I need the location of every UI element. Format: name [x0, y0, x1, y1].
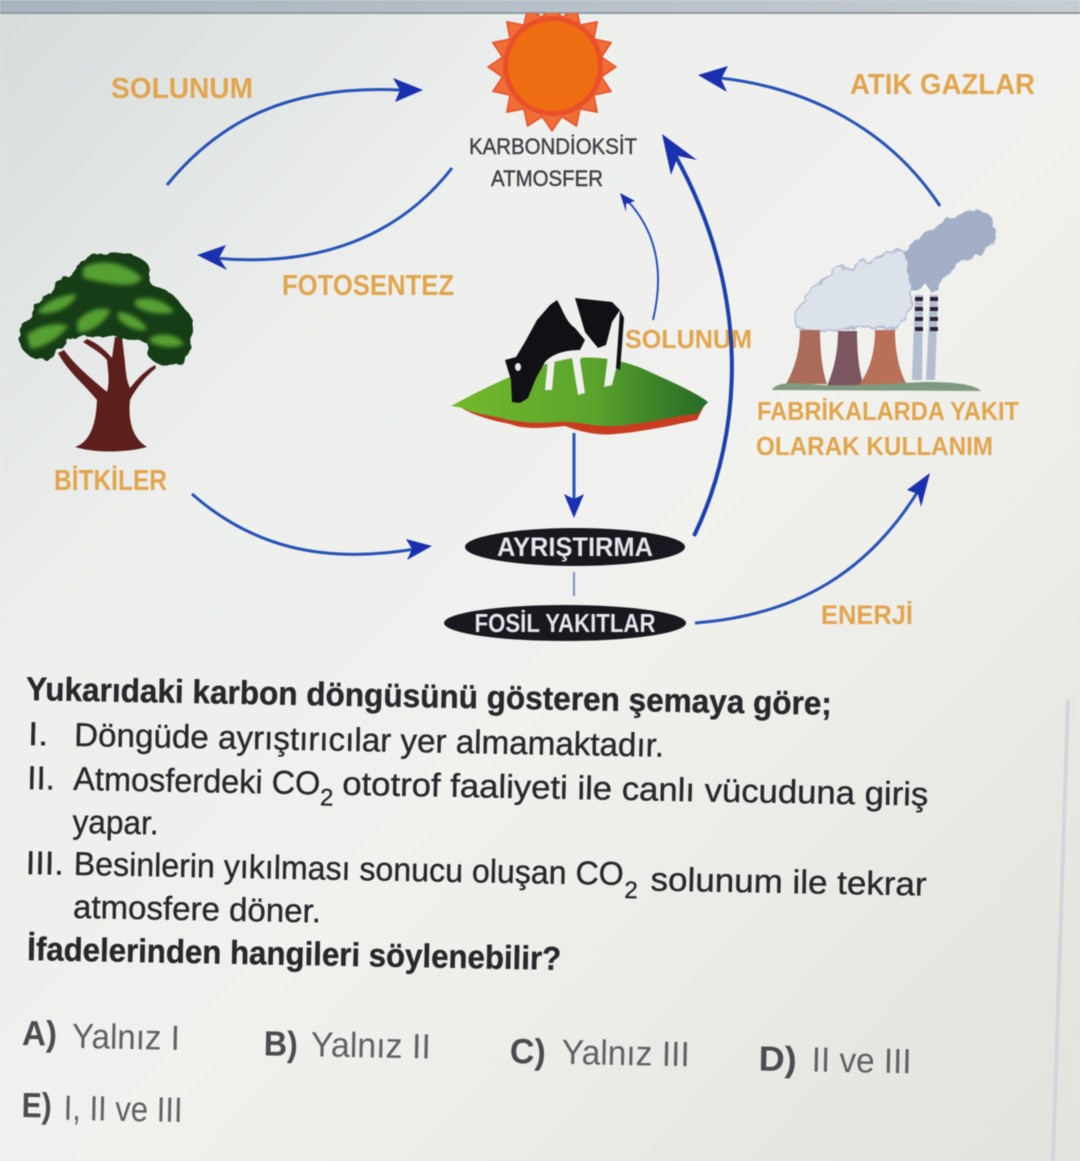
answer options: Yalnız I — [72, 1017, 180, 1058]
orange diagram labels: SOLUNUM — [111, 73, 253, 105]
orange diagram labels: BİTKİLER — [54, 465, 167, 497]
arrows — [167, 66, 940, 623]
question text: ototrof faaliyeti ile canlı vücuduna giriş — [342, 765, 929, 813]
question text: III. — [25, 844, 64, 882]
question text: yapar. — [72, 803, 159, 841]
tree highlights — [27, 263, 184, 348]
chimneys — [912, 295, 923, 380]
question text: I. — [28, 715, 49, 752]
question text: Döngüde ayrıştırıcılar yer almamaktadır. — [74, 716, 664, 764]
answer options: B) — [264, 1024, 298, 1064]
answer options: I, II ve III — [63, 1089, 183, 1130]
label: atmosphere — [469, 134, 637, 191]
cow black front — [505, 300, 585, 403]
question text — [21, 670, 930, 984]
tree canopy — [18, 252, 192, 365]
label: fossil fuels: FOSİL YAKITLAR — [474, 608, 656, 638]
factory white smoke — [795, 250, 914, 331]
grass mound — [451, 358, 708, 426]
answer options: A) — [22, 1014, 57, 1054]
orange diagram labels: ENERJİ — [821, 600, 913, 630]
orange diagram labels — [54, 69, 1035, 630]
question text: Besinlerin yıkılması sonucu oluşan CO — [73, 845, 624, 892]
question text: İfadelerinden hangileri söylenebilir? — [27, 930, 562, 977]
orange diagram labels: SOLUNUM — [625, 324, 752, 354]
soil edge — [462, 406, 704, 435]
answer options: E) — [21, 1086, 52, 1126]
cooling towers — [786, 330, 827, 384]
answer options: II ve III — [811, 1040, 912, 1081]
answer options: C) — [509, 1032, 546, 1072]
question text: atmosfere döner. — [73, 888, 321, 929]
answer options: Yalnız II — [311, 1025, 431, 1066]
tree trunk and branches — [58, 337, 156, 452]
label: decomposition: AYRIŞTIRMA — [497, 532, 653, 562]
question text: solunum ile tekrar — [650, 860, 927, 903]
icon: tree — [18, 252, 192, 452]
label: atmosphere: KARBONDİOKSİT — [469, 134, 637, 159]
icon: factory — [772, 210, 995, 391]
question text: II. — [27, 759, 55, 797]
chimney bands — [915, 297, 938, 331]
answer options — [20, 1014, 912, 1143]
question text: 2 — [624, 877, 638, 904]
factory gray smoke — [907, 210, 995, 293]
icon: sun — [488, 3, 616, 131]
cow white body and legs — [540, 298, 624, 395]
factory ground — [772, 382, 981, 391]
orange diagram labels: ATIK GAZLAR — [850, 69, 1035, 101]
label: decomposition — [465, 528, 685, 566]
question text: Yukarıdaki karbon döngüsünü gösteren şemaya göre; — [26, 670, 832, 722]
question text: Atmosferdeki CO — [73, 760, 321, 801]
label: atmosphere: ATMOSFER — [491, 166, 603, 191]
icon: cow on grass — [451, 298, 708, 435]
cow black rear — [575, 298, 624, 370]
orange diagram labels: OLARAK KULLANIM — [756, 431, 993, 461]
orange diagram labels: FOTOSENTEZ — [282, 270, 454, 302]
answer options: Yalnız III — [561, 1033, 690, 1074]
question text: 2 — [320, 784, 334, 812]
orange diagram labels: FABRİKALARDA YAKIT — [757, 396, 1019, 426]
answer options: D) — [758, 1040, 797, 1079]
